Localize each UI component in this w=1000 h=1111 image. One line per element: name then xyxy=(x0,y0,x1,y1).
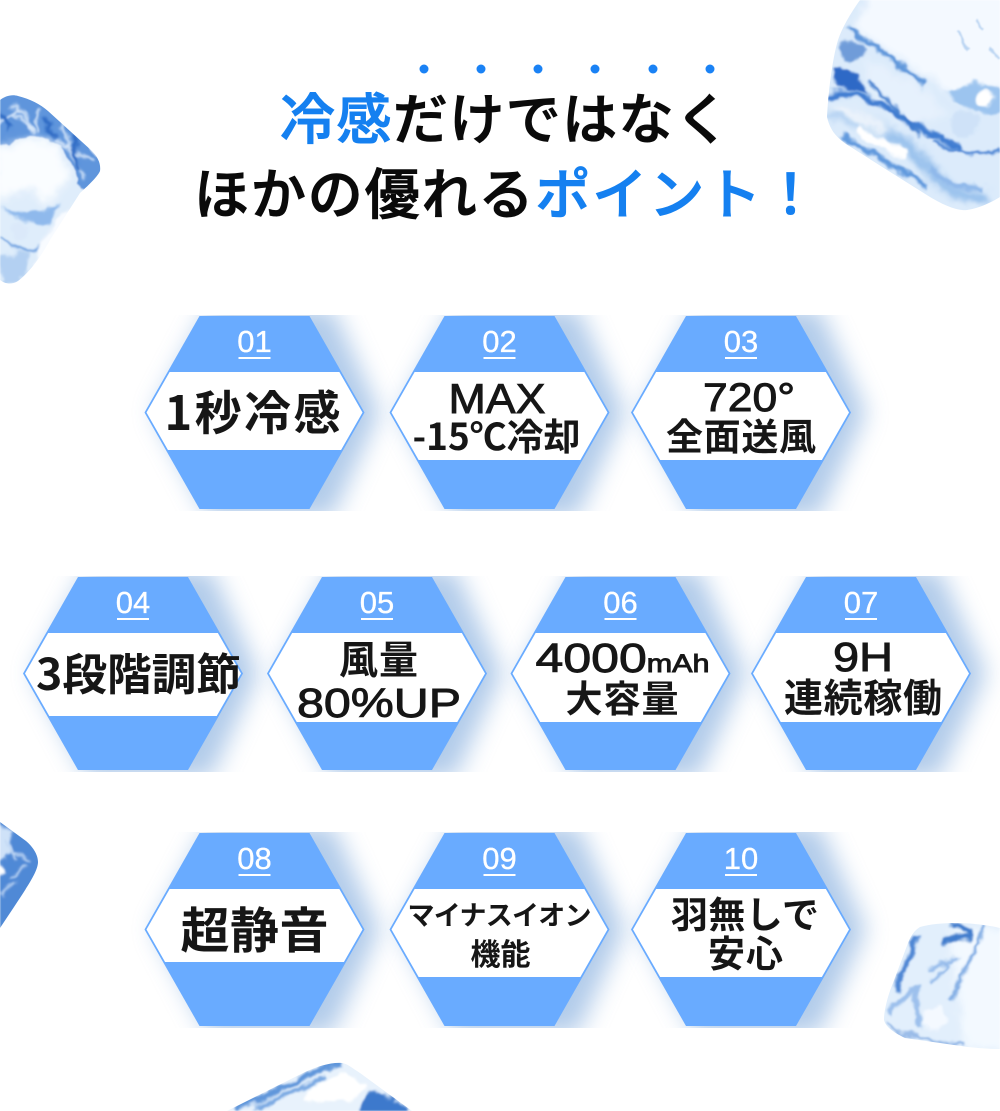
panel: 05: 05 xyxy=(360,585,394,620)
panel: 02: -15℃冷却 xyxy=(412,407,580,461)
panel: 07: 9H xyxy=(833,634,893,680)
panel: 03: 全面送風 xyxy=(666,407,816,461)
panel: 03: 03 xyxy=(724,324,758,359)
panel: 09 xyxy=(390,825,624,1034)
panel: 02: 02 xyxy=(482,324,517,359)
panel: 04: 3段階調節 xyxy=(36,639,241,703)
panel: 06: 大容量 xyxy=(566,669,678,723)
title: ほかの優れるポイント！ xyxy=(194,150,818,230)
panel: 01: 1秒冷感 xyxy=(164,375,340,444)
panel: 04 xyxy=(23,569,258,778)
panel: 09: マイナスイオン xyxy=(408,894,592,933)
icon: ice cube top right xyxy=(827,0,1000,210)
decorative dots above title xyxy=(420,64,714,74)
title xyxy=(194,75,818,230)
panel: 07 xyxy=(751,569,986,778)
panel: 01: 01 xyxy=(237,324,272,359)
panel: 06 xyxy=(510,569,746,778)
icon: ice cube bottom xyxy=(228,1062,412,1111)
panel: 08: 08 xyxy=(237,841,272,876)
panel: 09: 機能 xyxy=(470,930,530,974)
panel: 07: 07 xyxy=(844,585,878,620)
panel: 06: 4000 mAh xyxy=(536,635,710,681)
panel: 10: 羽無しで xyxy=(671,885,819,939)
panel: 05: 風量 xyxy=(339,630,418,686)
panel: 07: 連続稼働 xyxy=(784,668,942,724)
icon: ice cube left middle xyxy=(0,822,38,928)
panel: 10 xyxy=(631,825,866,1034)
panel: 05: 80%UP xyxy=(297,680,461,726)
panel: 03 xyxy=(631,308,866,517)
panel: 03: 720° xyxy=(703,376,795,420)
panel: 06: 06 xyxy=(603,585,638,620)
panel: 05 xyxy=(267,569,502,778)
icon: ice cube right bottom xyxy=(884,923,1000,1049)
panel: 02: MAX xyxy=(448,375,546,422)
panel: 10: 10 xyxy=(724,841,758,876)
title: 冷感だけではなく xyxy=(280,75,730,155)
panel: 08: 超静音 xyxy=(180,892,328,963)
panel: 08 xyxy=(144,825,380,1034)
panel: 02 xyxy=(390,308,624,517)
panel: 10: 安心 xyxy=(708,924,783,978)
panel: 09: 09 xyxy=(482,841,517,876)
panel: 01 xyxy=(144,308,380,517)
icon: ice cube top left xyxy=(0,95,100,284)
panel: 04: 04 xyxy=(116,585,150,620)
